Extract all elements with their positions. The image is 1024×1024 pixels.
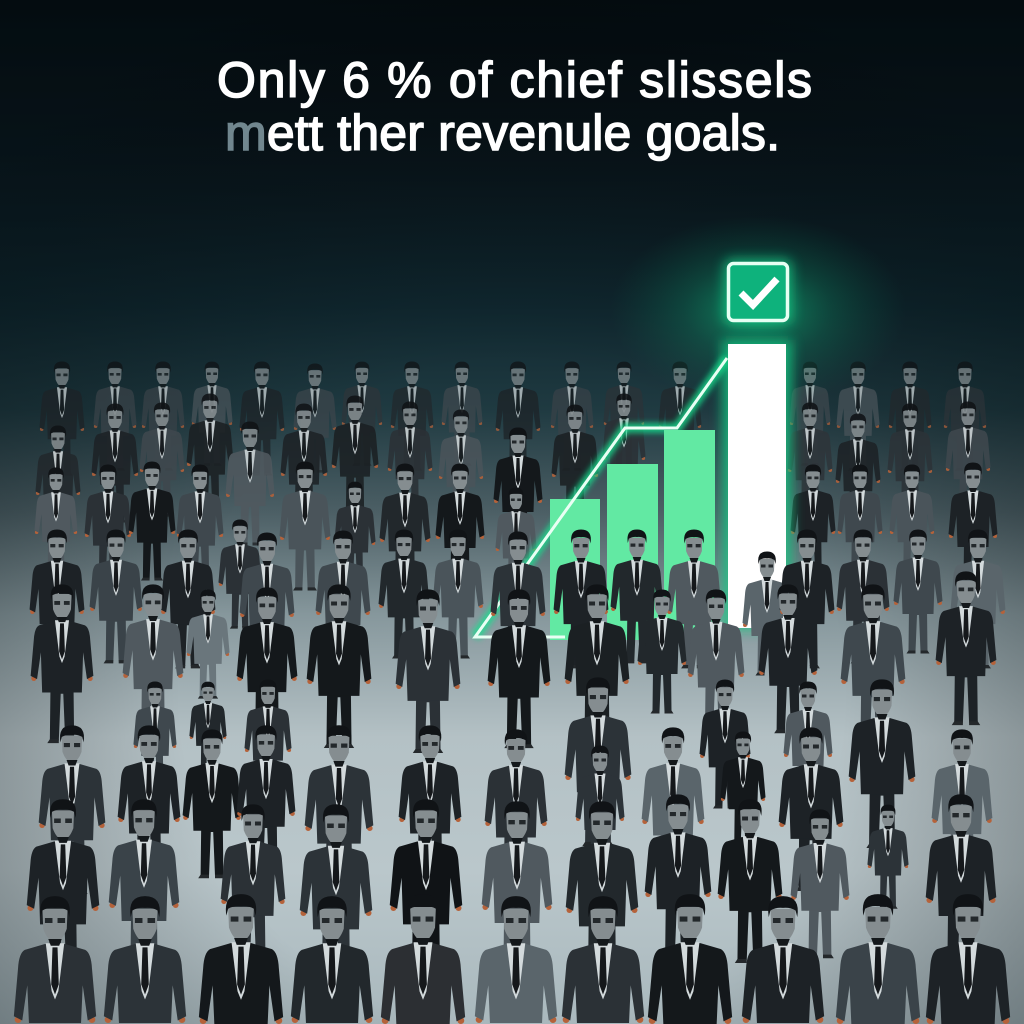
crowd: fourth row [30, 520, 1005, 676]
crowd: eighth row [27, 794, 996, 988]
bar 4 white [728, 344, 786, 628]
crowd: sixth row [133, 677, 915, 848]
trend line [475, 358, 727, 637]
chart glow [475, 215, 906, 637]
crowd: front row [14, 894, 1010, 1024]
title: mett ther revenule goals. [225, 105, 780, 161]
crowd: third row [34, 428, 997, 592]
title [217, 52, 812, 161]
bar 2 [607, 464, 658, 640]
crowd: second row [35, 394, 991, 546]
revenue bar chart [475, 215, 906, 640]
crowd: seventh row [39, 725, 992, 899]
crowd: back row [39, 362, 987, 476]
title: Only 6 % of chief slissels [217, 52, 812, 108]
crowd: fifth row [31, 571, 996, 753]
bar 1 [550, 499, 600, 640]
bar 3 [664, 430, 715, 640]
icon: check box [724, 259, 792, 325]
